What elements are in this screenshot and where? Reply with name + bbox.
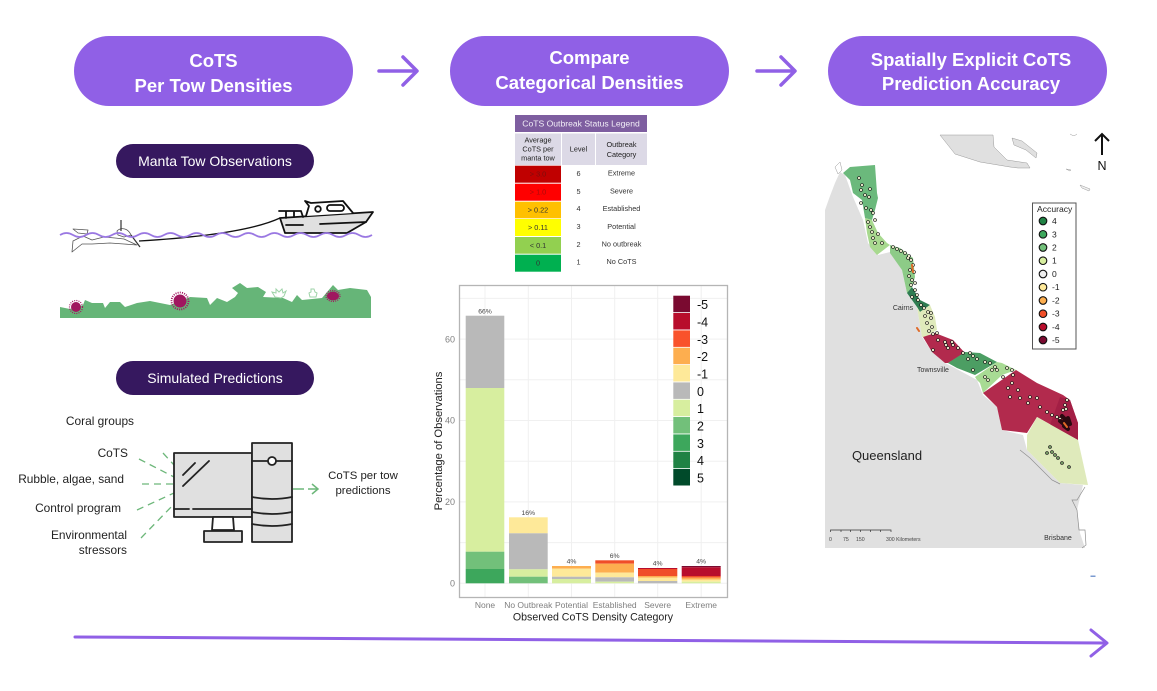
map legend: accuracy: 1 <box>1052 256 1057 266</box>
map legend: accuracy: Accuracy <box>1037 204 1073 214</box>
water surface <box>60 233 372 237</box>
map legend: accuracy: -2 <box>1052 296 1060 306</box>
bar: Extreme: 4% <box>696 558 706 566</box>
subheading: manta tow observations: Manta Tow Observations <box>138 153 292 169</box>
land: Queensland <box>825 172 1085 548</box>
model input labels: stressors <box>79 543 127 557</box>
arrow: computer to predictions <box>293 484 318 494</box>
subheading: simulated predictions <box>116 361 314 395</box>
subheading: simulated predictions: Simulated Predictions <box>147 370 283 386</box>
scale bar <box>829 530 921 543</box>
bar: No Outbreak: 16% <box>521 510 535 517</box>
model input labels: Rubble, algae, sand <box>18 472 124 486</box>
table: CoTS outbreak status legend: 6 <box>576 169 581 178</box>
bar: Severe <box>638 560 677 583</box>
small stray mark <box>1090 576 1096 577</box>
header: spatially explicit CoTS prediction accuracy <box>828 36 1107 106</box>
bar: Potential <box>552 558 591 583</box>
map legend: accuracy: -3 <box>1052 309 1060 319</box>
coastline detail <box>1020 450 1086 548</box>
bar: None <box>466 308 504 583</box>
y axis ticks: 20 <box>445 497 455 507</box>
arrow: header 2 to header 3 <box>757 57 795 85</box>
output label: predictions <box>335 485 391 497</box>
survey points <box>859 178 1070 467</box>
model input labels: Coral groups <box>66 414 134 428</box>
process timeline arrow <box>75 630 1107 656</box>
bar: Established: 6% <box>610 553 620 560</box>
chart legend: -4 <box>697 316 708 330</box>
model input labels: Environmental <box>51 528 127 542</box>
boat <box>279 201 373 233</box>
chart legend <box>673 296 708 486</box>
table: CoTS outbreak status legend: > 0.22 <box>528 206 548 214</box>
header: compare categorical densities: Categorical Densities <box>495 72 684 93</box>
table: CoTS outbreak status legend: No CoTS <box>606 257 637 266</box>
output label: CoTS per tow <box>328 470 399 482</box>
table: CoTS outbreak status legend: 5 <box>576 187 581 196</box>
map legend: accuracy: -5 <box>1052 335 1060 345</box>
scale bar: 75 <box>843 537 849 543</box>
header: CoTS per tow densities: Per Tow Densities <box>135 75 292 96</box>
table: CoTS outbreak status legend: > 1.0 <box>530 188 546 196</box>
header: CoTS per tow densities: CoTS <box>189 50 238 71</box>
table: CoTS outbreak status legend: 3 <box>576 222 581 231</box>
chart legend: 0 <box>697 385 704 399</box>
accuracy regions <box>843 165 1088 485</box>
y axis title: Percentage of Observations <box>433 371 445 510</box>
land: Papua New Guinea and islands <box>835 134 1090 191</box>
table: CoTS outbreak status legend: 1 <box>576 258 581 266</box>
stacked bar chart: percentage of observations by category <box>433 285 728 624</box>
header: compare categorical densities <box>450 36 729 106</box>
snorkeller <box>72 220 140 252</box>
map legend: accuracy: 3 <box>1052 229 1057 239</box>
chart legend: -3 <box>697 333 708 347</box>
bar: No Outbreak <box>509 510 548 583</box>
map legend: accuracy: 4 <box>1052 216 1057 226</box>
model input labels: CoTS <box>98 446 128 460</box>
chart legend: 1 <box>697 402 704 416</box>
starfish right <box>326 290 340 302</box>
table: CoTS outbreak status legend: > 0.11 <box>528 223 548 232</box>
bar: Severe: 4% <box>653 560 663 568</box>
scale bar: 150 <box>856 537 865 543</box>
map legend: accuracy: 2 <box>1052 242 1057 252</box>
table: CoTS outbreak status legend: Average <box>524 136 552 144</box>
tow rope <box>139 218 280 241</box>
table: CoTS outbreak status legend: 2 <box>576 240 581 249</box>
bar: Extreme <box>682 558 721 583</box>
starfish centre <box>172 292 188 310</box>
bar: None: 66% <box>478 308 492 316</box>
arrow: header 1 to header 2 <box>379 57 417 85</box>
y axis ticks <box>445 334 455 588</box>
chart legend: -1 <box>697 368 708 382</box>
output label <box>328 470 399 497</box>
x axis categories: Extreme <box>685 600 717 610</box>
x axis categories: No Outbreak <box>504 600 553 610</box>
x axis categories: Severe <box>644 600 671 610</box>
table: CoTS outbreak status legend: Severe <box>610 186 633 196</box>
header: CoTS per tow densities <box>74 36 353 106</box>
table: CoTS outbreak status legend: Extreme <box>608 168 635 178</box>
map place labels <box>852 305 1072 542</box>
chart legend: 3 <box>697 437 704 451</box>
bar: Potential: 4% <box>567 558 576 566</box>
y axis ticks: 0 <box>450 578 455 588</box>
model input labels: Control program <box>35 501 121 515</box>
chart legend: 5 <box>697 472 704 486</box>
table: CoTS outbreak status legend: < 0.1 <box>530 241 546 250</box>
table: CoTS outbreak status legend: Established <box>603 204 640 213</box>
chart legend: -5 <box>697 298 708 312</box>
illustration: reef with crown-of-thorns starfish <box>60 283 371 318</box>
table: CoTS outbreak status legend: CoTS Outbreak Status Legend <box>522 118 640 128</box>
x axis categories <box>475 600 717 610</box>
table: CoTS outbreak status legend: Category <box>607 150 637 159</box>
table: CoTS outbreak status legend: Outbreak <box>606 140 637 149</box>
map: spatial accuracy along the Great Barrier Reef <box>825 134 1109 548</box>
table: CoTS outbreak status legend: manta tow <box>521 154 556 162</box>
table: CoTS outbreak status legend: No outbreak <box>602 240 642 248</box>
table: CoTS outbreak status legend: Potential <box>607 222 636 231</box>
chart legend: 4 <box>697 454 704 468</box>
table: CoTS outbreak status legend: Level <box>570 144 588 154</box>
table: CoTS outbreak status legend: 0 <box>536 258 540 268</box>
map place labels: Townsville <box>917 367 949 374</box>
illustration: boat towing snorkeller <box>60 201 373 252</box>
map legend: accuracy: -1 <box>1052 282 1060 292</box>
x axis categories: Established <box>593 600 637 610</box>
map legend: accuracy <box>1032 203 1076 349</box>
header: spatially explicit CoTS prediction accuracy: Spatially Explicit CoTS <box>871 49 1071 70</box>
model input labels <box>18 414 134 557</box>
y axis ticks: 40 <box>445 416 455 426</box>
map place labels: Cairns <box>893 305 914 312</box>
table: CoTS outbreak status legend: > 3.0 <box>530 170 546 178</box>
header: compare categorical densities: Compare <box>549 47 630 68</box>
bar: Established <box>595 553 634 583</box>
map place labels: Queensland <box>852 448 922 463</box>
header: spatially explicit CoTS prediction accuracy: Prediction Accuracy <box>882 73 1061 94</box>
dashed input lines <box>137 453 174 538</box>
chart legend: 2 <box>697 420 704 434</box>
table: CoTS outbreak status legend: 4 <box>576 204 581 213</box>
map legend: accuracy: 0 <box>1052 269 1057 279</box>
x axis categories: Potential <box>555 600 588 610</box>
subheading: manta tow observations <box>116 144 314 178</box>
y axis ticks: 60 <box>445 334 455 344</box>
table: CoTS outbreak status legend <box>515 115 647 272</box>
map legend: accuracy: -4 <box>1052 322 1060 332</box>
chart legend: -2 <box>697 350 708 364</box>
x axis categories: None <box>475 600 495 610</box>
starfish left <box>70 300 82 314</box>
icon: desktop computer <box>174 443 292 542</box>
north arrow <box>1095 134 1109 173</box>
north arrow: N <box>1097 159 1107 173</box>
x axis title: Observed CoTS Density Category <box>513 612 674 624</box>
scale bar: 0 <box>829 537 832 543</box>
scale bar: 300 Kilometers <box>886 537 921 543</box>
map place labels: Brisbane <box>1044 535 1072 542</box>
table: CoTS outbreak status legend: CoTS per <box>522 144 554 154</box>
